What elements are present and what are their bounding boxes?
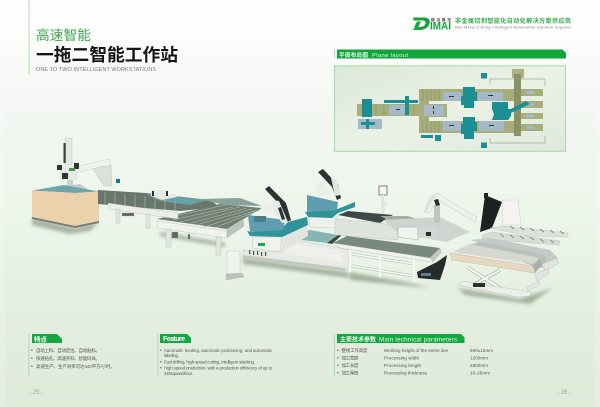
scissor lift (457, 267, 539, 297)
parameters table: 10-25mm (470, 370, 490, 376)
feature list: • (31, 364, 33, 370)
parameters table: • (337, 363, 339, 369)
parameters table: Processing width (384, 356, 419, 360)
plane layout heading: Plane layout (372, 53, 408, 59)
feature list: • (31, 356, 33, 362)
monitor stand (379, 186, 388, 214)
feature text: High speed production, with a production efficiency of up to (164, 366, 273, 370)
stacked lift tables (450, 238, 559, 281)
transfer table and robot (383, 193, 477, 242)
parameters table: Processing thickness (384, 370, 428, 376)
parameters table: 900±15mm (470, 348, 493, 353)
roller ticks (364, 78, 519, 136)
heading: Feature: Feature (163, 336, 185, 343)
panel: plane layout (334, 50, 566, 151)
heading: main technical parameters: Main technical parameters (379, 336, 457, 343)
teal machines (361, 73, 530, 148)
parameters table: Working height of the entire line (384, 348, 448, 353)
logo and slogan: Non Metal Cutting Intelligent Automation Solution Supplier (455, 26, 572, 30)
slogan: 非金属切割智能化自动化解决方案供应商 (455, 17, 571, 25)
plane layout heading: 平面布局图 (339, 51, 368, 59)
parameters table: 1200mm (470, 356, 488, 360)
machine shadows (32, 218, 552, 304)
parameters table: 整线工作高度 (342, 347, 368, 354)
layout diagram (334, 66, 566, 151)
feature text: 340square/hour. (164, 371, 193, 376)
production line machine illustration (32, 138, 568, 304)
parameters table: • (337, 348, 339, 354)
feature panel: chinese (28, 334, 115, 376)
roller conveyors (98, 190, 262, 229)
beige board stack (32, 185, 99, 228)
black incline conveyor (480, 193, 521, 232)
feature text: Automatic feeding, automatic positioning, and automatic (164, 348, 273, 353)
grey table with frame (333, 236, 447, 282)
feature list: 快速钻孔、高速开料、智能码垛。 (36, 355, 100, 362)
feature list: 高速生产、生产效率可达340平方/小时。 (36, 363, 115, 370)
parameters table: 2800mm (470, 363, 488, 368)
dark table (335, 211, 420, 240)
feature text: • (160, 348, 162, 354)
feature list: 自动上料、自动定位、自动贴标。 (36, 347, 100, 354)
feature list: • (31, 348, 33, 354)
cutting station two (305, 169, 355, 228)
heading: main technical parameters (337, 334, 464, 343)
parameters table: 加工厚度 (342, 370, 359, 376)
feature text: labeling. (164, 353, 179, 358)
heading: main technical parameters: 主要技术参数 (340, 335, 376, 343)
conveyor sections (357, 69, 543, 136)
conveyor beams and legs (108, 203, 244, 255)
page number 26: - 26 - (557, 390, 571, 396)
parameters table: • (337, 370, 339, 376)
technical parameters panel (334, 334, 493, 376)
blue work plates (358, 91, 534, 131)
icon: Dimai logo mark (412, 18, 430, 30)
subtitle heading: 高速智能 (36, 27, 91, 43)
feature text: Fast drilling, high-speed cutting, intelligent stacking. (164, 360, 255, 364)
wiring rails (490, 79, 545, 143)
logo and slogan: 德迈数控 (431, 17, 451, 22)
feature list (31, 347, 115, 370)
parameters table: 加工宽度 (342, 354, 359, 362)
logo and slogan (412, 17, 572, 32)
dark marks (396, 95, 494, 126)
feature text: • (160, 366, 162, 372)
feature text: • (160, 360, 162, 366)
cutting station one (247, 186, 308, 252)
page number 25: - 25 - (29, 390, 43, 396)
main title: 一拖二智能工作站 (36, 44, 178, 65)
parameters table: Processing length (384, 363, 421, 368)
heading: 特点: 特点 (34, 334, 48, 344)
logo and slogan: IMAI (430, 20, 451, 32)
feature text (160, 348, 273, 376)
title block (28, 0, 178, 74)
control pedestal (226, 251, 244, 280)
feature panel: english (158, 334, 273, 376)
parameters table: 加工长度 (342, 362, 359, 369)
parameters table: • (337, 356, 339, 362)
english title: ONE TO TWO INTELLIGENT WORKSTATIONS (36, 67, 156, 73)
plane layout heading (334, 50, 566, 59)
long machine base (243, 230, 350, 271)
finger racks (482, 226, 568, 245)
robot gantry loader (55, 138, 120, 191)
parameters table (337, 347, 493, 376)
